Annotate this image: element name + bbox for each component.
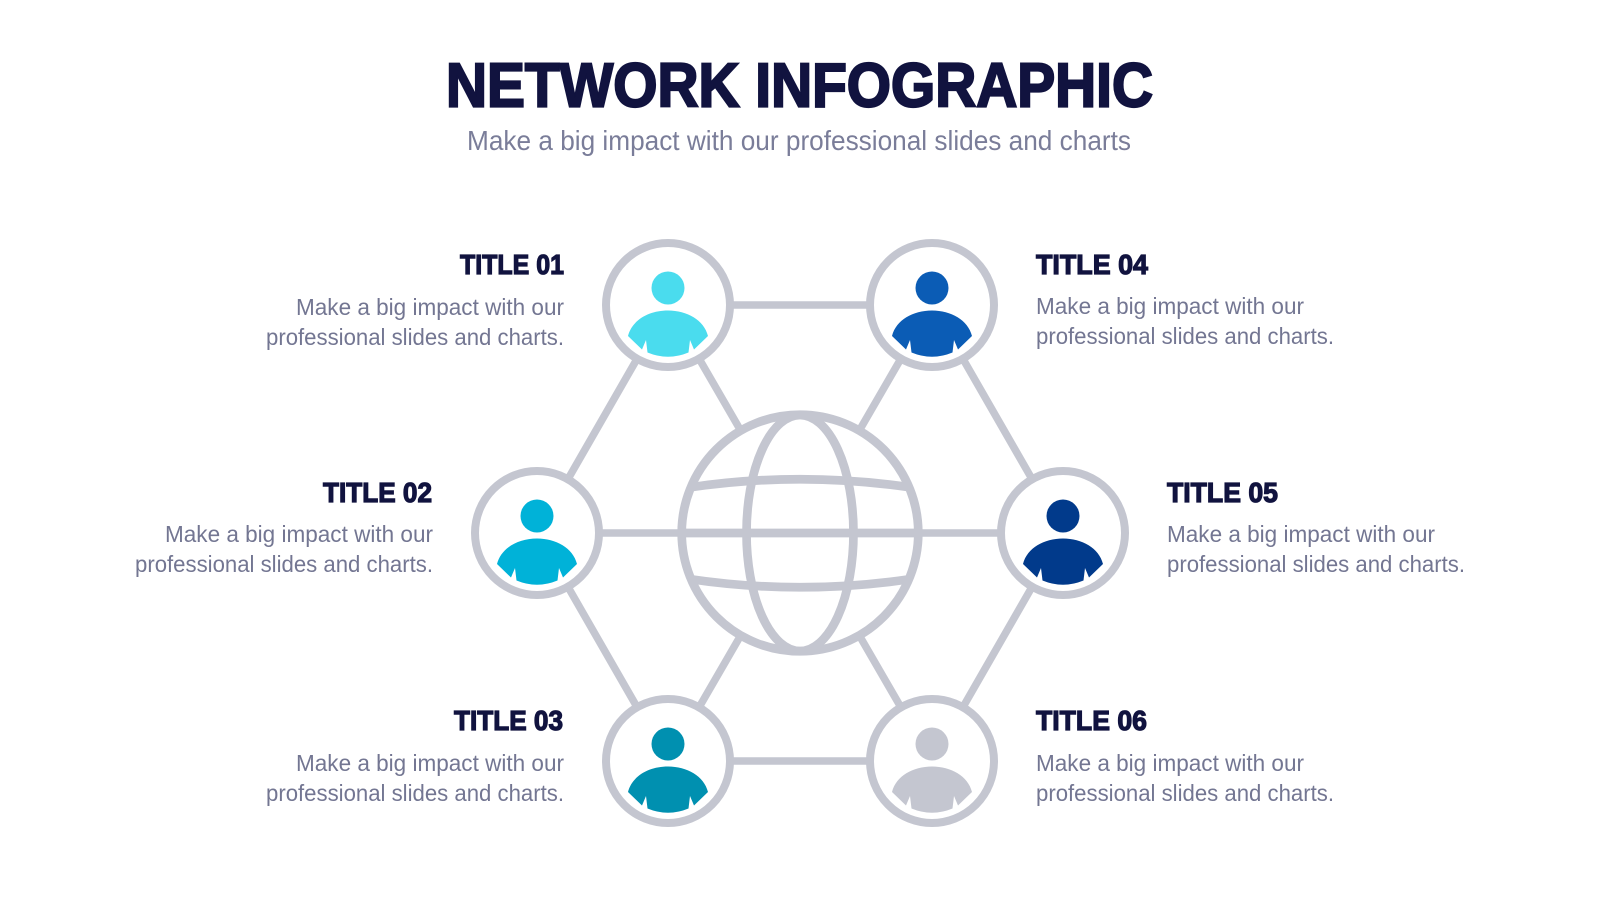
text block: title 03: TITLE 03 bbox=[454, 705, 563, 736]
node 06: person icon bbox=[870, 699, 994, 823]
node 05: person icon bbox=[1001, 471, 1125, 595]
text block: title 06: Make a big impact with our bbox=[1036, 750, 1304, 776]
text block: title 06 bbox=[1036, 705, 1334, 806]
node 04: person icon bbox=[870, 243, 994, 367]
text block: title 03: Make a big impact with our bbox=[296, 750, 564, 776]
icon: globe bbox=[682, 415, 918, 651]
text block: title 04: TITLE 04 bbox=[1036, 249, 1148, 280]
subtitle: Make a big impact with our professional slides and charts bbox=[467, 125, 1131, 156]
text block: title 03 bbox=[266, 705, 564, 806]
text block: title 05: TITLE 05 bbox=[1167, 477, 1278, 508]
text block: title 04: professional slides and charts. bbox=[1036, 323, 1334, 349]
text block: title 02 bbox=[135, 477, 433, 577]
network connectors bbox=[537, 305, 1063, 761]
text block: title 01: Make a big impact with our bbox=[296, 294, 564, 320]
node 02: person icon bbox=[475, 471, 599, 595]
text block: title 05: Make a big impact with our bbox=[1167, 521, 1435, 547]
text block: title 02: Make a big impact with our bbox=[165, 521, 433, 547]
text block: title 01 bbox=[266, 249, 564, 350]
text block: title 04: Make a big impact with our bbox=[1036, 293, 1304, 319]
text block: title 05: professional slides and charts. bbox=[1167, 551, 1465, 577]
text block: title 01: TITLE 01 bbox=[460, 249, 564, 280]
text block: title 03: professional slides and charts. bbox=[266, 780, 564, 806]
text block: title 02: TITLE 02 bbox=[323, 477, 432, 508]
node 01: person icon bbox=[606, 243, 730, 367]
text block: title 04 bbox=[1036, 249, 1334, 349]
text block: title 05 bbox=[1167, 477, 1465, 577]
text block: title 02: professional slides and charts. bbox=[135, 551, 433, 577]
text block: title 06: TITLE 06 bbox=[1036, 705, 1147, 736]
text block: title 01: professional slides and charts. bbox=[266, 324, 564, 350]
title: NETWORK INFOGRAPHIC bbox=[446, 52, 1153, 120]
node 03: person icon bbox=[606, 699, 730, 823]
text block: title 06: professional slides and charts. bbox=[1036, 780, 1334, 806]
